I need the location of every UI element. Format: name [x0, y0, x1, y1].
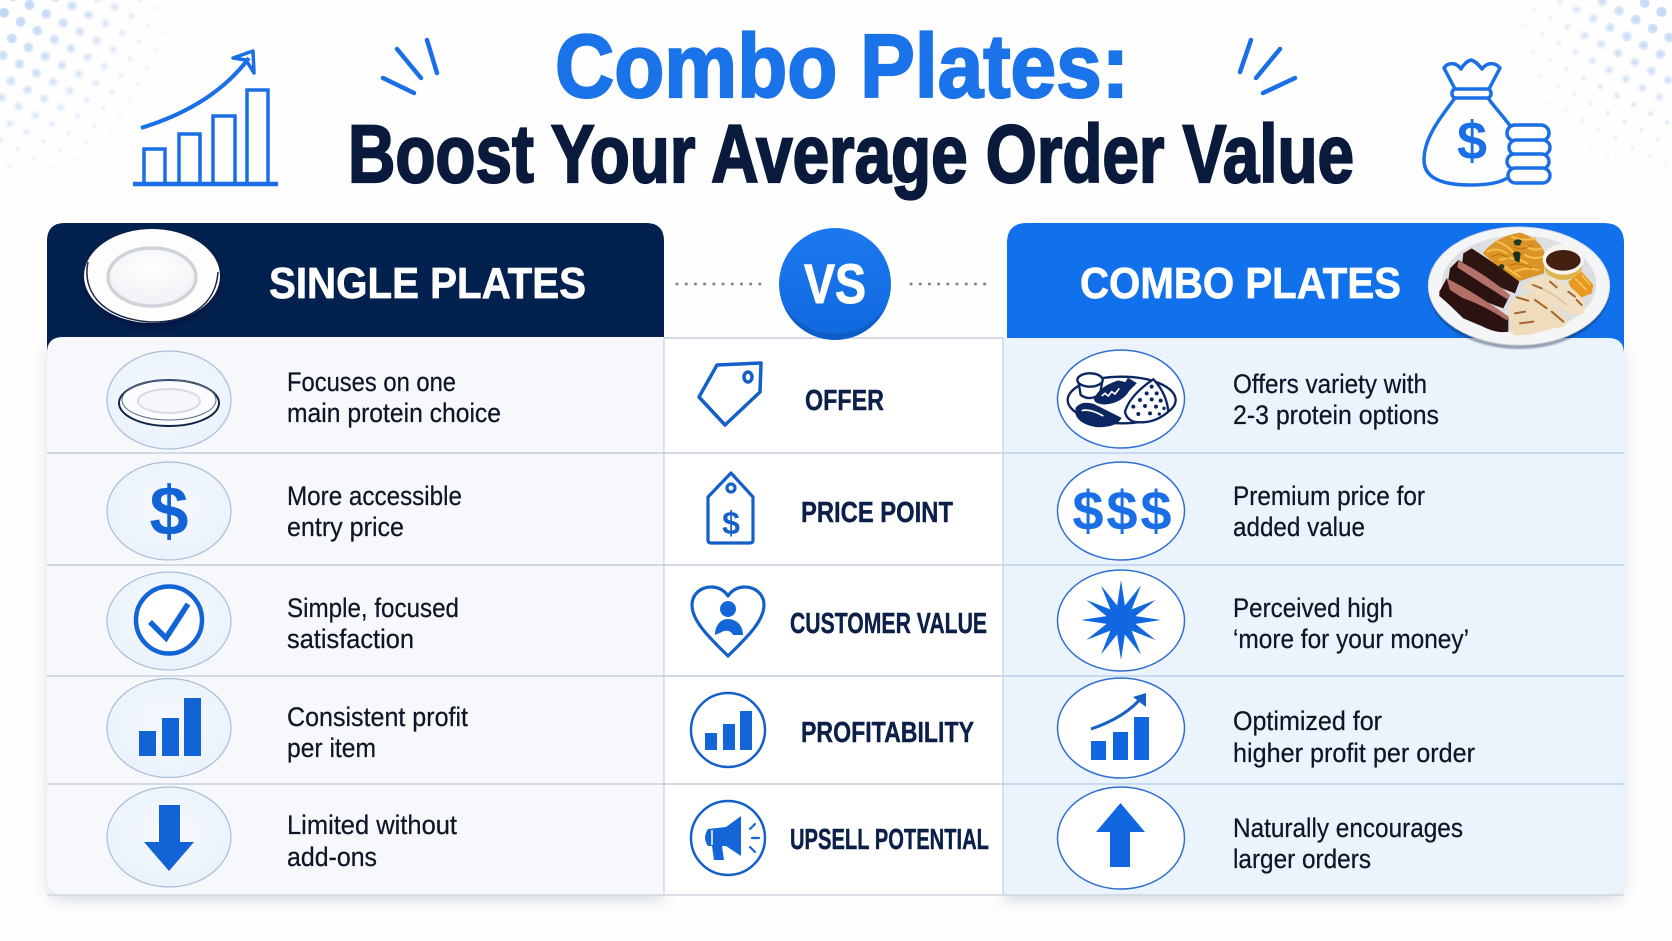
- icon: tag: [699, 363, 761, 425]
- row 3: customer value: [107, 570, 1469, 671]
- icon: money bag with coins: $: [1457, 111, 1487, 171]
- panel: centre column: [664, 338, 1003, 895]
- single profit text: Consistent profit: [287, 702, 468, 732]
- icon: megaphone circle: [691, 801, 765, 875]
- combo offer text: [1233, 369, 1439, 430]
- offer label: OFFER: [805, 385, 884, 417]
- orange side: [1568, 272, 1593, 297]
- icon: price tag: $: [722, 505, 740, 541]
- single value text: satisfaction: [287, 624, 414, 654]
- combo value text: [1233, 593, 1469, 654]
- icon: right sparks: [1240, 40, 1295, 93]
- icon: heart with person: [692, 587, 764, 656]
- single value text: Simple, focused: [287, 593, 459, 623]
- icon: triple dollar disc: $: [1106, 479, 1138, 542]
- table grid lines: [47, 338, 1624, 895]
- single upsell text: Limited without: [287, 810, 457, 840]
- row 4: profitability: [107, 678, 1475, 778]
- single plates body: [47, 337, 664, 895]
- combo plates body: [1003, 338, 1624, 895]
- icon: triple dollar disc: $: [1140, 479, 1172, 542]
- grilled chicken: [1523, 276, 1586, 315]
- icon: down arrow disc: [107, 787, 231, 887]
- single plates header bar: [47, 223, 664, 360]
- combo profit text: [1233, 706, 1475, 768]
- combo upsell text: [1233, 813, 1463, 874]
- combo value text: Perceived high: [1233, 593, 1393, 623]
- price point label: PRICE POINT: [801, 497, 953, 529]
- steak: [1462, 248, 1519, 293]
- icon: price tag: [708, 473, 753, 543]
- icon: combo food plate: [1428, 227, 1610, 349]
- sauce cup: [1545, 255, 1582, 280]
- icon: triple dollar disc: $: [1072, 479, 1104, 542]
- title line 1: Combo Plates:: [555, 17, 1129, 117]
- noodles: [1483, 233, 1545, 282]
- upsell potential label: UPSELL POTENTIAL: [790, 824, 989, 856]
- single profit text: per item: [287, 733, 376, 763]
- combo profit text: Optimized for: [1233, 706, 1382, 736]
- single offer text: Focuses on one: [287, 367, 456, 397]
- single value text: [287, 593, 459, 654]
- single offer text: [287, 367, 501, 428]
- icon: dollar disc: [107, 462, 231, 560]
- single price text: More accessible: [287, 481, 462, 511]
- icon: left sparks: [383, 40, 437, 93]
- row 5: upsell potential: [107, 787, 1463, 889]
- vs connector dots left: [677, 282, 760, 286]
- row 1: offer: [107, 350, 1439, 449]
- icon: up arrow disc: [1058, 787, 1184, 889]
- combo plates header bar: [1007, 223, 1624, 360]
- single plates heading: SINGLE PLATES: [269, 259, 586, 308]
- single profit text: [287, 702, 468, 763]
- title line 2: Boost Your Average Order Value: [348, 109, 1354, 200]
- icon: check disc: [107, 572, 231, 670]
- icon: rising bar chart: [133, 51, 278, 184]
- icon: plate disc: [107, 351, 231, 449]
- single price text: entry price: [287, 512, 404, 542]
- vs connector dots right: [911, 282, 993, 286]
- combo profit text: higher profit per order: [1233, 738, 1475, 768]
- panel: combo plates column: [1003, 223, 1624, 895]
- combo upsell text: Naturally encourages: [1233, 813, 1463, 843]
- combo price text: [1233, 481, 1425, 542]
- icon: triple dollar disc: [1058, 462, 1184, 560]
- icon: dollar disc: $: [150, 472, 188, 550]
- single price text: [287, 481, 462, 542]
- single offer text: main protein choice: [287, 398, 501, 428]
- combo price text: Premium price for: [1233, 481, 1425, 511]
- vs badge: [779, 228, 891, 340]
- combo offer text: 2-3 protein options: [1233, 400, 1439, 430]
- icon: white plate header: [84, 229, 220, 323]
- icon: starburst disc: [1058, 570, 1184, 671]
- single upsell text: [287, 810, 457, 872]
- combo upsell text: larger orders: [1233, 844, 1371, 874]
- customer value label: CUSTOMER VALUE: [790, 608, 987, 640]
- icon: bars disc: [107, 678, 231, 778]
- title: [348, 17, 1354, 200]
- icon: bars circle: [691, 693, 765, 767]
- row 2: price point: [107, 462, 1425, 560]
- icon: food disc: [1058, 350, 1184, 448]
- vs badge: VS: [804, 252, 866, 315]
- combo offer text: Offers variety with: [1233, 369, 1427, 399]
- icon: growth chart disc: [1058, 678, 1184, 778]
- combo value text: ‘more for your money’: [1233, 624, 1469, 654]
- combo plates heading: COMBO PLATES: [1080, 259, 1401, 308]
- profitability label: PROFITABILITY: [801, 717, 974, 749]
- panel: single plates column: [47, 223, 664, 895]
- icon: money bag with coins: [1424, 60, 1550, 185]
- combo price text: added value: [1233, 512, 1365, 542]
- single upsell text: add-ons: [287, 842, 377, 872]
